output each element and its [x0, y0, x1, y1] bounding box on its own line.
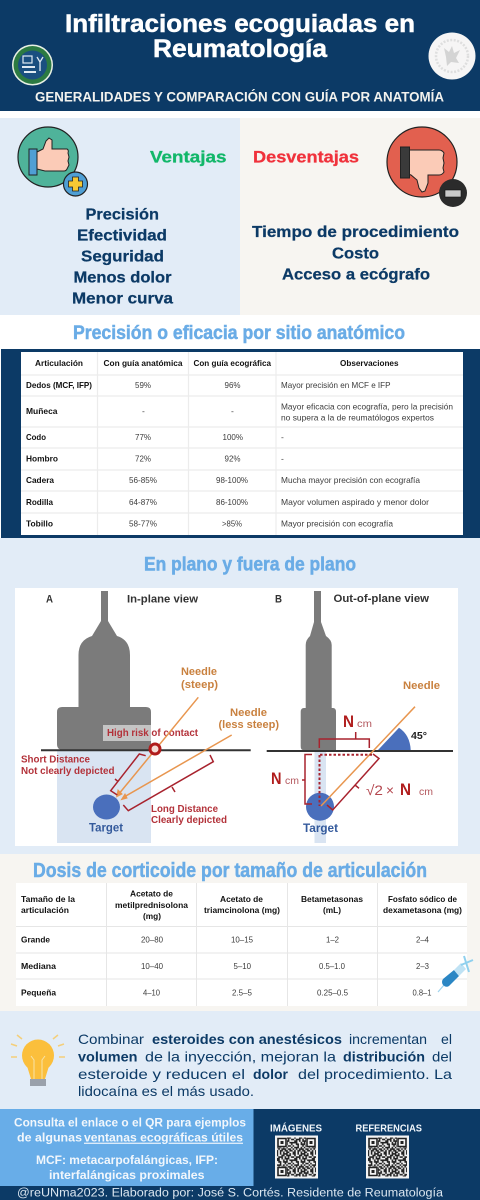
panel: consulta: interfalángicas proximales [49, 1170, 204, 1182]
row: mediana: 0.5–1.0 [319, 961, 345, 971]
row: mediana: 5–10 [234, 961, 251, 971]
panel: consulta: MCF: metacarpofalángicas, IFP: [36, 1155, 218, 1167]
row: pequeña: 2.5–5 [232, 988, 252, 998]
diagram B: out-of-plane view: Target [303, 823, 338, 835]
diagram A: in-plane view: Needle [230, 707, 267, 719]
dose table header: metilprednisolona [115, 900, 188, 910]
dose table header: Fosfato sódico de [388, 894, 457, 904]
dose table header: (mL) [323, 905, 341, 915]
row: codo: 77% [135, 432, 151, 442]
text block: incrementan [349, 1031, 427, 1047]
row: dedos: Mayor precisión en MCF e IFP [281, 380, 391, 390]
diagram A: in-plane view [21, 591, 279, 843]
diagram B: out-of-plane view: B [275, 594, 282, 606]
table header: Observaciones [340, 358, 399, 368]
panel: dosis de corticoide [0, 854, 480, 1011]
panel: ventajas [0, 118, 240, 315]
diagram B: out-of-plane view: N [400, 780, 411, 799]
table header [35, 358, 399, 368]
list: ventajas: Menos dolor [74, 270, 172, 286]
diagram A: in-plane view: Not clearly depicted [21, 766, 114, 777]
row: grande [21, 935, 429, 945]
text block: del [432, 1048, 452, 1064]
QR: imágenes: IMÁGENES [270, 1122, 322, 1135]
brackets [302, 732, 379, 810]
table header: Articulación [35, 358, 83, 368]
panel: en plano y fuera de plano [0, 538, 480, 854]
row: tobillo: Mayor precisión con ecografía [281, 519, 393, 529]
list: desventajas: Costo [332, 246, 379, 262]
list: desventajas: Acceso a ecógrafo [282, 266, 430, 284]
row: mediana: 10–40 [141, 961, 163, 971]
list: ventajas [72, 206, 173, 308]
row: cadera: 56-85% [129, 475, 157, 485]
row: pequeña: 0.8–1 [412, 988, 432, 998]
row: codo: - [281, 432, 284, 442]
angle wedge [378, 728, 411, 750]
panel: consejo [0, 1011, 480, 1109]
row: dedos [26, 380, 391, 390]
text block: el [441, 1031, 452, 1047]
row: dedos: 96% [224, 380, 241, 390]
text block: dolor [253, 1066, 289, 1082]
title [65, 10, 415, 63]
icon: right society logo [428, 32, 476, 80]
QR: imágenes [270, 1122, 322, 1178]
text block: del procedimiento. La [298, 1066, 452, 1082]
needle [321, 707, 415, 806]
heading: ventajas: Ventajas [150, 148, 226, 166]
dose table header: articulación [21, 905, 69, 915]
diagram B: out-of-plane view: √2 [366, 782, 383, 798]
title: Infiltraciones ecoguiadas en [65, 10, 415, 38]
icon: left society logo [12, 44, 53, 86]
panel: consulta: de algunas [17, 1133, 82, 1145]
diagram B: out-of-plane view: N [271, 769, 282, 788]
row: rodilla [26, 497, 429, 507]
list: desventajas: Tiempo de procedimiento [252, 224, 459, 241]
subtitle: GENERALIDADES Y COMPARACIÓN CON GUÍA POR ANATOMÍA [35, 90, 444, 104]
text block: volumen [78, 1048, 138, 1064]
list: desventajas [252, 224, 459, 284]
text block [78, 1031, 452, 1099]
diagram background [15, 588, 458, 846]
diagram A: in-plane view: In-plane view [127, 594, 198, 606]
row: tobillo: Tobillo [26, 519, 53, 529]
text block: esteroides con anestésicos [152, 1031, 342, 1047]
row: codo [26, 432, 284, 442]
target [93, 794, 120, 820]
dose table header [21, 889, 462, 921]
header panel [0, 0, 480, 111]
row: muñeca: no supera a la de reumatólogos expertos [281, 413, 434, 423]
row: mediana: Mediana [21, 961, 56, 971]
text block: Combinar [78, 1031, 144, 1047]
panel: pie [0, 1109, 480, 1200]
diagram B: out-of-plane view: × [386, 782, 394, 798]
table header: Con guía anatómica [104, 358, 183, 368]
diagram A: in-plane view: A [46, 594, 53, 606]
row: grande: 10–15 [231, 935, 253, 945]
row: rodilla: 64-87% [129, 497, 157, 507]
text block: distribución [343, 1048, 425, 1064]
diagram B: out-of-plane view: cm [419, 786, 433, 798]
row: muñeca: Mayor eficacia con ecografía, pero la precisión [281, 402, 453, 412]
diagram A: in-plane view: (steep) [181, 679, 218, 691]
panel: consulta: Consulta el enlace o el QR para ejemplos [14, 1118, 246, 1130]
needles [118, 697, 232, 797]
table background [16, 883, 467, 1006]
row: dedos: 59% [135, 380, 151, 390]
row: tobillo: >85% [222, 519, 242, 529]
panel: tabla de precisión [1, 349, 480, 538]
heading: dosis: Dosis de corticoide por tamaño de articulación [33, 859, 427, 882]
row: mediana: 2–3 [416, 961, 429, 971]
diagram B: out-of-plane view: cm [357, 718, 372, 730]
heading: precisión: Precisión o eficacia por sitio anatómico [73, 323, 405, 344]
row: codo: 100% [222, 432, 243, 442]
row: dedos: Dedos (MCF, IFP) [26, 380, 92, 390]
footer credit: @reUNma2023. Elaborado por: José S. Cortés. Residente de Reumatología [17, 1188, 444, 1200]
text block: lidocaína es el más usado. [78, 1083, 254, 1099]
icon: thumbs up [18, 127, 88, 196]
title: Reumatología [153, 35, 328, 63]
row: grande: 2–4 [416, 935, 429, 945]
row: rodilla: Mayor volumen aspirado y menor dolor [281, 497, 429, 507]
text block: de la inyección, mejoran la [145, 1048, 336, 1064]
dose table header: Acetato de [130, 889, 173, 899]
diagram A: in-plane view: High risk of contact [107, 728, 199, 739]
row: muñeca: - [231, 406, 234, 416]
row: pequeña: 0.25–0.5 [317, 988, 348, 998]
panel: consulta: ventanas ecográficas útiles [84, 1133, 243, 1145]
list: ventajas: Precisión [86, 206, 159, 224]
dose table header: dexametasona (mg) [383, 905, 462, 915]
row: grande: 1–2 [326, 935, 339, 945]
row: hombro [26, 454, 284, 464]
row: cadera: Cadera [26, 475, 54, 485]
list: ventajas: Efectividad [77, 228, 167, 244]
row: hombro: 72% [135, 454, 151, 464]
row: cadera: 98-100% [216, 475, 248, 485]
dotted lines [320, 755, 373, 806]
row: cadera: Mucha mayor precisión con ecografía [281, 475, 420, 485]
row: rodilla: 86-100% [216, 497, 248, 507]
row: pequeña [21, 988, 432, 998]
dose table header: Acetato de [220, 894, 263, 904]
diagram B: out-of-plane view [267, 591, 453, 843]
dose table header: Betametasonas [301, 894, 363, 904]
table header: Con guía ecográfica [194, 358, 271, 368]
row: mediana [21, 961, 429, 971]
list: ventajas: Seguridad [81, 248, 164, 266]
diagram B: out-of-plane view: cm [285, 775, 299, 787]
brackets [111, 754, 213, 811]
diagram A: in-plane view: Clearly depicted [151, 815, 227, 826]
panel: consulta [0, 1109, 254, 1186]
row: pequeña: Pequeña [21, 988, 56, 998]
probe [301, 591, 336, 750]
dose table header: triamcinolona (mg) [204, 905, 280, 915]
diagram A: in-plane view: Target [89, 823, 123, 835]
heading: desventajas: Desventajas [253, 148, 359, 166]
list: ventajas: Menor curva [72, 290, 173, 308]
probe [57, 591, 151, 750]
row: grande: 20–80 [141, 935, 163, 945]
QR: referencias [356, 1124, 422, 1178]
row: muñeca [26, 402, 453, 423]
diagram A: in-plane view: Needle [181, 666, 217, 678]
row: tobillo [26, 519, 393, 529]
diagram A: in-plane view: Long Distance [151, 804, 218, 815]
icon: syringe [438, 956, 473, 992]
row: codo: Codo [26, 432, 46, 442]
text block: esteroide y reducen el [78, 1066, 245, 1082]
dose table header: Tamaño de la [21, 894, 75, 904]
diagram B: out-of-plane view: Out-of-plane view [334, 593, 429, 605]
heading: en plano: En plano y fuera de plano [144, 555, 356, 576]
row: grande: Grande [21, 935, 50, 945]
dose table header: (mg) [143, 911, 161, 921]
row: hombro: - [281, 454, 284, 464]
icon: thumbs down [387, 127, 467, 207]
row: cadera [26, 475, 420, 485]
row: muñeca: - [142, 406, 145, 416]
row: rodilla: Rodilla [26, 497, 53, 507]
panel: desventajas [240, 118, 480, 315]
row: tobillo: 58-77% [129, 519, 157, 529]
row: hombro: 92% [224, 454, 241, 464]
QR: referencias: REFERENCIAS [356, 1124, 422, 1135]
diagram B: out-of-plane view: 45° [411, 731, 427, 742]
icon: light bulb [11, 1035, 65, 1086]
diagram B: out-of-plane view: Needle [403, 680, 440, 692]
row: muñeca: Muñeca [26, 406, 58, 416]
row: hombro: Hombro [26, 454, 58, 464]
diagram A: in-plane view: Short Distance [21, 755, 90, 766]
row: pequeña: 4–10 [143, 988, 160, 998]
diagram A: in-plane view: (less steep) [218, 719, 279, 731]
diagram B: out-of-plane view: N [343, 712, 354, 731]
